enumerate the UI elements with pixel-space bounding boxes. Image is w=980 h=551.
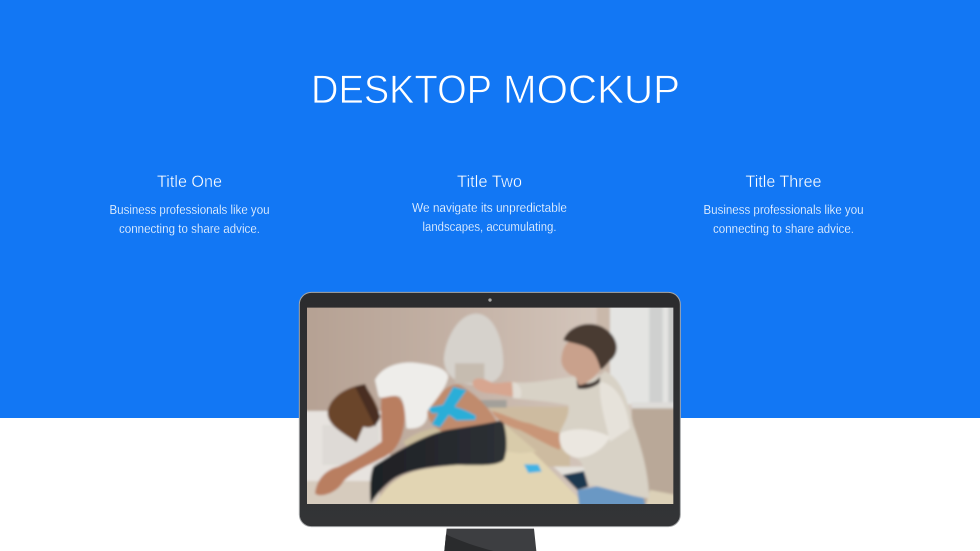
back tape <box>427 387 476 428</box>
floor <box>307 481 381 504</box>
column: title three: connecting to share advice. <box>713 222 854 236</box>
therapist jeans <box>576 485 646 504</box>
tape on bed <box>524 464 542 473</box>
therapist sweater <box>512 371 649 498</box>
room wall <box>307 308 634 498</box>
blue background band <box>0 0 980 418</box>
background table <box>487 407 570 467</box>
patient hair <box>328 384 380 442</box>
right wall <box>632 408 677 508</box>
column: title one: Business professionals like you <box>110 203 270 217</box>
therapist hair <box>563 324 617 370</box>
column: title one: connecting to share advice. <box>119 222 260 236</box>
column: title two <box>412 173 567 234</box>
patient back <box>427 384 497 432</box>
stand shadow <box>444 534 493 551</box>
mirror <box>444 314 503 385</box>
title <box>311 68 680 112</box>
massage bed <box>376 451 580 504</box>
column: title two: landscapes, accumulating. <box>422 220 556 234</box>
column: title three <box>704 173 864 236</box>
desktop monitor <box>299 292 680 551</box>
window <box>608 308 670 405</box>
photo on screen <box>303 304 677 508</box>
column: title three: Business professionals like you <box>704 203 864 217</box>
therapist back arm <box>473 378 517 397</box>
webcam <box>488 298 492 302</box>
column: title one <box>110 173 270 236</box>
therapist neck and face <box>561 340 600 385</box>
title: MOCKUP <box>503 68 680 112</box>
monitor bezel <box>299 292 680 527</box>
title: DESKTOP <box>311 68 492 112</box>
column: title three: Title Three <box>746 173 822 191</box>
column: title one: Title One <box>157 173 222 191</box>
column: title two: Title Two <box>457 173 522 191</box>
sweater tail <box>553 467 587 476</box>
monitor stand <box>444 529 536 551</box>
patient arm <box>315 394 405 495</box>
patient leggings <box>370 420 507 503</box>
column: title two: We navigate its unpredictable <box>412 201 567 215</box>
wall panel <box>303 411 390 482</box>
patient shirt <box>375 362 448 429</box>
therapist front arm <box>492 411 562 450</box>
sweater highlights <box>513 382 630 458</box>
